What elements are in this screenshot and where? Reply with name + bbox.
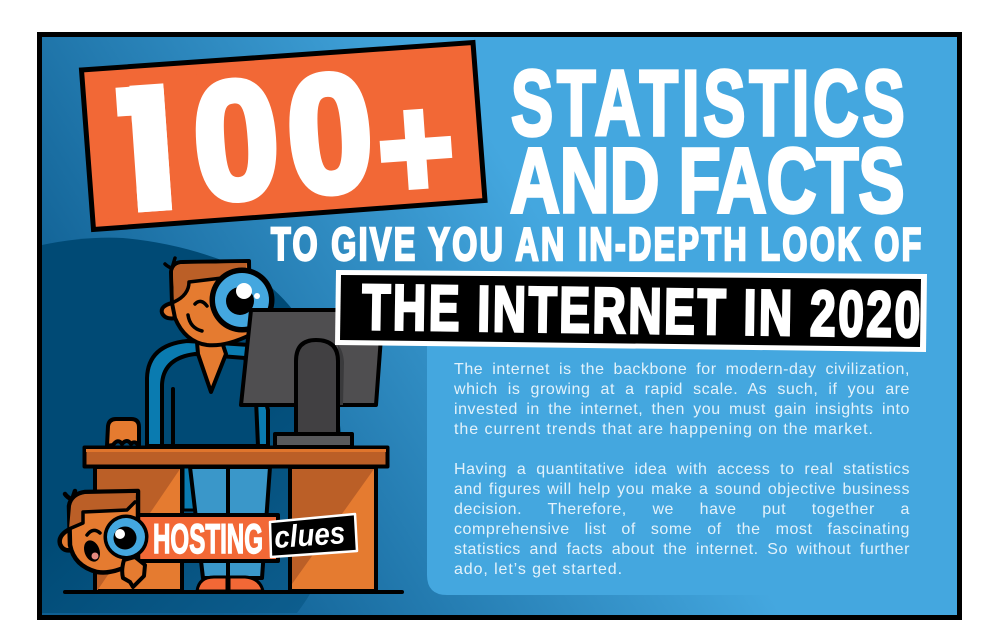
badge number: 00 [187, 38, 379, 236]
intro text: decision. Therefore, we have put together a [454, 501, 910, 518]
heading: statistics and facts: STATISTICS [511, 51, 905, 155]
logo badge: clues: clues [273, 515, 346, 555]
desk [84, 448, 388, 591]
intro text: the current trends that are happening on the market. [454, 421, 874, 438]
intro text: Having a quantitative idea with access to real statistics [454, 461, 910, 478]
character head [162, 258, 250, 345]
logo mascot head [60, 491, 138, 572]
ground line [65, 590, 402, 594]
title text: THE INTERNET IN 2020 [362, 272, 921, 351]
intro text: statistics and facts about the internet. So without further [454, 541, 910, 558]
magnifying glass [210, 268, 274, 332]
heading: statistics and facts [510, 51, 905, 232]
heading: statistics and facts: AND FACTS [510, 129, 904, 232]
intro text: ado, let’s get started. [454, 561, 623, 578]
intro text: The internet is the backbone for modern-day civilization, [454, 361, 910, 378]
character body [147, 341, 268, 446]
intro text: which is growing at a rapid scale. As such, if you are [454, 381, 910, 398]
desk left leg [95, 467, 182, 591]
logo: Hosting Clues [60, 491, 357, 587]
subheading: TO GIVE YOU AN IN-DEPTH LOOK OF [271, 219, 921, 270]
title banner [335, 270, 927, 352]
orange badge [82, 33, 485, 252]
badge number: 1 [97, 56, 202, 247]
dark background shape [42, 238, 345, 613]
panel: intro text background [427, 340, 954, 595]
desk right leg [290, 467, 376, 591]
badge number: + [372, 64, 460, 232]
icon: left hand [107, 419, 139, 446]
character legs [190, 467, 270, 591]
desk top [84, 448, 388, 466]
chair [183, 467, 196, 510]
intro text [454, 361, 910, 578]
badge number [85, 33, 460, 252]
intro text: invested in the internet, then you must gain insights into [454, 401, 910, 418]
intro text: and figures will help you make a sound objective business [454, 481, 910, 498]
intro text: comprehensive list of some of the most fascinating [454, 521, 910, 538]
character at desk [65, 258, 402, 592]
computer monitor [241, 310, 383, 447]
logo word: hosting: HOSTING [153, 515, 263, 562]
logo magnifier and hand [104, 514, 148, 587]
logo banner [133, 515, 278, 561]
